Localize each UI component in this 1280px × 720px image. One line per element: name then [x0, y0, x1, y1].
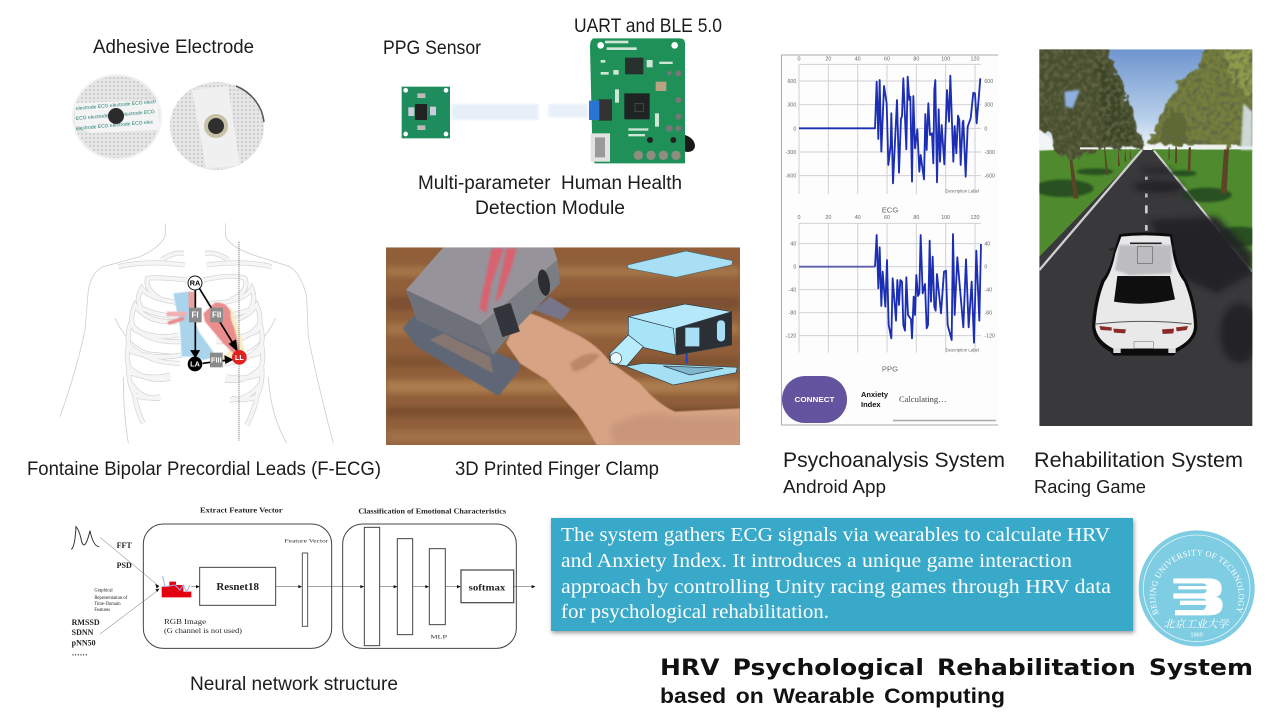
title: based on Wearable Computing — [660, 684, 1005, 708]
feature vector — [284, 539, 328, 626]
chart: ECG: 0 — [798, 57, 801, 63]
chart: ECG: -300 — [984, 150, 995, 156]
lead labels: RA — [190, 279, 201, 288]
label: multi-parameter module — [418, 173, 682, 219]
section headings: Extract Feature Vector — [200, 506, 284, 515]
chart: PPG — [786, 215, 995, 373]
label: rehabilitation system — [1034, 449, 1243, 497]
input labels — [72, 541, 132, 658]
label: psychoanalysis system: Android App — [783, 477, 886, 497]
heart — [167, 292, 245, 363]
body outline — [60, 223, 333, 443]
electrode: back with snap — [170, 82, 264, 170]
chart: ECG: 0 — [793, 126, 796, 132]
lead labels: FI — [191, 310, 199, 319]
label: multi-parameter module: Multi-parameter Human Health — [418, 173, 682, 194]
chart: PPG: 80 — [913, 215, 919, 221]
MLP label: MLP — [430, 635, 447, 641]
input labels: Representation of — [94, 596, 128, 601]
chart: ECG: -300 — [786, 150, 796, 156]
classification container — [343, 524, 516, 648]
chart: ECG: 100 — [941, 57, 950, 63]
chart: PPG: PPG — [882, 364, 898, 373]
input labels: pNN50 — [72, 638, 96, 647]
diagram: thorax with Fontaine leads — [60, 223, 333, 443]
screen frame — [782, 55, 998, 425]
RGB image caption: (G channel is not used) — [164, 626, 242, 635]
PPG sensor board — [402, 87, 450, 138]
chart: PPG: 20 — [825, 215, 831, 221]
chart: ECG: 80 — [913, 57, 919, 63]
Resnet18 block — [200, 567, 276, 605]
connect button: CONNECT — [794, 395, 835, 404]
game screenshot: racing game — [1033, 43, 1263, 426]
chart: ECG: -600 — [786, 174, 796, 180]
description callout: The system gathers ECG signals via wearables to calculate HRV — [561, 524, 1110, 546]
wood background — [386, 247, 740, 445]
input labels: PSD — [117, 561, 132, 570]
CAD model body — [610, 304, 737, 385]
lead arrows — [192, 288, 237, 363]
clamp base — [403, 297, 571, 396]
rib cage — [118, 253, 272, 425]
input labels: Time-Domain — [94, 602, 121, 607]
description callout: approach by controlling Unity racing games through HRV data — [561, 576, 1111, 598]
Resnet18 block: Resnet18 — [216, 582, 259, 593]
main PCB — [589, 38, 695, 163]
softmax block: softmax — [469, 582, 506, 593]
road shadows — [1133, 168, 1260, 363]
input labels: SDNN — [72, 628, 94, 637]
chart: PPG: 120 — [971, 215, 979, 221]
lead labels: FII — [212, 310, 221, 319]
softmax block — [461, 570, 514, 603]
lead labels — [188, 276, 247, 371]
chart: ECG: 300 — [787, 103, 796, 109]
chart: PPG: -120 — [786, 334, 796, 340]
photo: adhesive electrodes — [73, 75, 264, 170]
chart: PPG: 40 — [790, 242, 796, 248]
label: adhesive electrode: Adhesive Electrode — [93, 37, 254, 58]
electrode: front with printed liner — [73, 75, 161, 159]
label: psychoanalysis system: Psychoanalysis System — [783, 449, 1005, 472]
trees: right row — [1143, 43, 1260, 193]
car — [1092, 232, 1197, 356]
title — [660, 655, 1253, 708]
label: UART and BLE: UART and BLE 5.0 — [574, 16, 722, 37]
chart: PPG: 100 — [941, 215, 950, 221]
RGB image caption: RGB Image — [164, 617, 207, 626]
chart: ECG: 120 — [971, 57, 979, 63]
chart: ECG: 60 — [884, 57, 890, 63]
chart: ECG: Description Label — [946, 188, 979, 193]
label: finger clamp: 3D Printed Finger Clamp — [455, 459, 659, 480]
RGB image thumbnail — [162, 576, 191, 597]
feature vector: Feature Vector — [284, 539, 328, 545]
chart: PPG: -120 — [984, 334, 995, 340]
signal waveform — [71, 527, 99, 549]
label: Fontaine leads: Fontaine Bipolar Precordial Leads (F-ECG) — [27, 459, 381, 480]
anxiety index readout: Anxiety — [861, 390, 889, 399]
label: psychoanalysis system — [783, 449, 1005, 497]
chart: PPG: -40 — [984, 288, 992, 294]
chart: PPG: -80 — [984, 311, 992, 317]
chart: ECG: 40 — [855, 57, 861, 63]
vertical reference line — [238, 242, 240, 441]
trees: left row — [1033, 43, 1144, 198]
chart: PPG: 0 — [793, 265, 796, 271]
chart: PPG: Description Label — [946, 347, 979, 352]
label: rehabilitation system: Rehabilitation System — [1034, 449, 1243, 472]
photo: health detection module boards — [402, 38, 695, 163]
chart: PPG: 0 — [798, 215, 801, 221]
chart: ECG: 600 — [984, 79, 993, 85]
chart: PPG: 0 — [984, 265, 987, 271]
chart: PPG: 40 — [855, 215, 861, 221]
chart: ECG: 0 — [984, 126, 987, 132]
tree shadows — [1033, 168, 1263, 247]
anxiety index readout — [861, 390, 996, 420]
logo calligraphy: 北京工业大学 — [1163, 617, 1230, 632]
input labels: FFT — [117, 541, 132, 550]
CAD model lid — [627, 251, 733, 277]
logo: Beijing University of Technology — [1138, 530, 1255, 646]
app screen: psychoanalysis system — [782, 55, 998, 425]
input labels: Features — [94, 608, 110, 613]
chart: ECG: 600 — [787, 79, 796, 85]
lead labels: FIII — [211, 355, 222, 364]
description callout — [551, 518, 1133, 631]
RGB image caption — [164, 617, 242, 635]
label: PPG sensor: PPG Sensor — [383, 38, 482, 59]
chart: PPG: -40 — [789, 288, 796, 294]
feature extraction container — [143, 524, 332, 648]
clamp housing — [406, 247, 560, 355]
input labels: Graphical — [94, 589, 113, 594]
input labels: RMSSD — [72, 618, 100, 627]
diagram: neural network structure — [71, 506, 535, 658]
chart: ECG: -600 — [984, 174, 995, 180]
anxiety index readout: Index — [861, 400, 881, 409]
chart: ECG: 20 — [825, 57, 831, 63]
MLP layers — [364, 527, 445, 646]
label: rehabilitation system: Racing Game — [1034, 477, 1146, 497]
label: multi-parameter module: Detection Module — [475, 198, 625, 219]
chart: PPG: -80 — [789, 311, 796, 317]
finger — [506, 313, 740, 445]
title: HRV Psychological Rehabilitation System — [660, 655, 1253, 681]
lead labels: LA — [190, 360, 201, 369]
ribbon cable — [452, 104, 588, 120]
lead labels: LL — [235, 353, 244, 362]
chart: ECG: 300 — [984, 103, 993, 109]
description callout: for psychological rehabilitation. — [561, 601, 829, 623]
input arrows — [100, 537, 158, 634]
description callout: and Anxiety Index. It introduces a unique game interaction — [561, 550, 1072, 572]
flow arrows — [191, 585, 535, 588]
chart: PPG: 40 — [984, 242, 990, 248]
sky and ground — [1039, 49, 1252, 426]
photo: 3D printed finger clamp — [386, 247, 740, 445]
electrode: front with printed liner: electrode ECG electrode ECG electr — [76, 99, 157, 112]
electrode: front with printed liner: electrode ECG electrode ECG elec — [76, 119, 154, 132]
input labels: …… — [72, 649, 88, 658]
logo year: 1960 — [1190, 632, 1203, 638]
logo ring text: BEIJING UNIVERSITY OF TECHNOLOGY — [1150, 550, 1244, 616]
electrode: front with printed liner: ECG electrode ECG electrode ECG — [76, 109, 155, 122]
chart: ECG: ECG — [882, 206, 898, 215]
connect button — [782, 376, 847, 423]
logo B mark — [1173, 578, 1223, 615]
chart: PPG: 60 — [884, 215, 890, 221]
section headings — [200, 506, 506, 516]
label: neural network structure: Neural network structure — [190, 674, 398, 695]
anxiety index readout: Calculating… — [899, 394, 947, 404]
chart: ECG — [786, 57, 995, 215]
section headings: Classification of Emotional Characteristics — [358, 507, 506, 516]
